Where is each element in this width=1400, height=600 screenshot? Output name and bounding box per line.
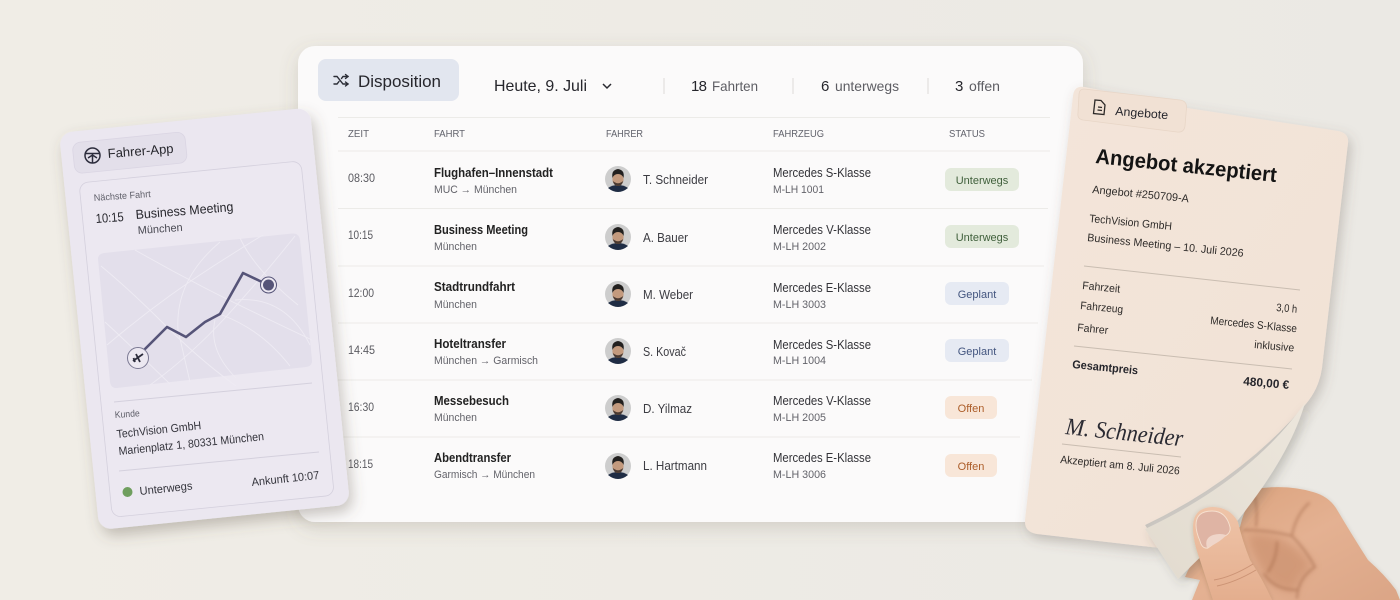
row: 08:30: 08:30: [348, 173, 375, 185]
row: 18:15: Offen: [958, 461, 984, 473]
row: 10:15: M-LH 2002: [773, 241, 826, 253]
row: 10:15: München: [434, 241, 477, 253]
table header: [348, 129, 985, 140]
row: 10:15: Mercedes V-Klasse: [773, 223, 871, 237]
line items: Fahrer: [1077, 322, 1109, 337]
row: 12:00: M. Weber: [643, 288, 693, 302]
total price: Gesamtpreis: [1072, 359, 1139, 377]
row: 08:30: T. Schneider: [643, 173, 708, 187]
row: 14:45: Mercedes S-Klasse: [773, 338, 871, 352]
status: [122, 470, 320, 498]
next ride: München: [137, 222, 183, 237]
next ride: [93, 189, 234, 237]
line items: Fahrzeit: [1082, 280, 1121, 296]
line items: [1077, 280, 1298, 354]
row: 14:45: 14:45: [348, 345, 375, 357]
date selector: Heute, 9. Juli: [494, 78, 587, 95]
tab: Angebote: Angebote: [1115, 104, 1169, 122]
status: Ankunft 10:07: [251, 470, 320, 489]
line items: Mercedes S-Klasse: [1210, 315, 1297, 335]
flap of curled paper: [1145, 403, 1305, 579]
row: 18:15: 18:15: [348, 459, 373, 471]
tab: Fahrer-App: [72, 132, 188, 174]
summary stats: unterwegs: [835, 78, 899, 94]
customer: Marienplatz 1, 80331 München: [118, 431, 265, 458]
row: 18:15: [348, 451, 997, 481]
panel: Fahrer-App: [59, 108, 350, 530]
customer: TechVision GmbH: [116, 420, 202, 441]
row: 16:30: München: [434, 412, 477, 424]
offer details: Angebot #250709-A: [1092, 184, 1190, 205]
row: 14:45: München → Garmisch: [434, 355, 538, 367]
row: 18:15: Mercedes E-Klasse: [773, 451, 871, 465]
row: 18:15: M-LH 3006: [773, 469, 826, 481]
route line: [144, 273, 262, 350]
row: 18:15: Garmisch → München: [434, 469, 535, 481]
row: 12:00: [348, 280, 1009, 311]
tab: Disposition: Disposition: [358, 73, 441, 91]
row: 10:15: A. Bauer: [643, 231, 688, 245]
customer: Kunde: [114, 408, 140, 421]
offer details: [1087, 184, 1244, 260]
row: 08:30: Unterwegs: [956, 175, 1009, 187]
line items: Fahrzeug: [1080, 300, 1124, 316]
summary stats: offen: [969, 78, 1000, 94]
next ride: Nächste Fahrt: [93, 189, 151, 204]
row: 08:30: M-LH 1001: [773, 184, 824, 196]
row: 14:45: S. Kovač: [643, 345, 686, 359]
title: Angebot akzeptiert: [1094, 145, 1278, 187]
row: 16:30: Mercedes V-Klasse: [773, 394, 871, 408]
icon: shuffle: [334, 74, 348, 86]
status: Unterwegs: [139, 480, 193, 498]
panel: Angebote: [1025, 87, 1348, 548]
marker: airport start: [128, 348, 148, 368]
row: 16:30: Messebesuch: [434, 394, 509, 408]
tab: Fahrer-App: Fahrer-App: [107, 141, 174, 161]
row: 14:45: M-LH 1004: [773, 355, 826, 367]
summary stats: [664, 78, 1000, 95]
summary stats: Fahrten: [712, 78, 758, 94]
offer details: Business Meeting – 10. Juli 2026: [1087, 232, 1244, 260]
row: 08:30: Mercedes S-Klasse: [773, 166, 871, 180]
row: 14:45: Geplant: [958, 346, 996, 358]
customer: [114, 408, 265, 458]
table header: STATUS: [949, 129, 985, 140]
line items: inklusive: [1254, 339, 1295, 354]
next ride: 10:15: [95, 209, 124, 226]
row: 14:45: [348, 337, 1009, 367]
icon: steering wheel: [85, 148, 100, 163]
row: 16:30: Offen: [958, 403, 984, 415]
summary stats: 3: [955, 78, 963, 95]
table header: FAHRZEUG: [773, 129, 824, 140]
row: 12:00: Stadtrundfahrt: [434, 280, 516, 294]
table header: FAHRER: [606, 129, 643, 140]
line items: 3,0 h: [1276, 302, 1298, 316]
lower finger shade: [1247, 534, 1313, 592]
marker: destination: [260, 277, 276, 293]
thumb: [1193, 507, 1272, 600]
fingers: [1185, 487, 1400, 600]
table header: ZEIT: [348, 129, 369, 140]
row: 12:00: Geplant: [958, 289, 996, 301]
row: 18:15: Abendtransfer: [434, 451, 511, 465]
row: 16:30: [348, 394, 997, 424]
panel: Disposition table: [298, 46, 1083, 522]
row: 16:30: D. Yilmaz: [643, 402, 692, 416]
icon: document: [1094, 100, 1105, 114]
row: 16:30: 16:30: [348, 402, 374, 414]
signature: M. Schneider: [1063, 414, 1185, 452]
row: 10:15: Unterwegs: [956, 232, 1009, 244]
row: 12:00: 12:00: [348, 288, 374, 300]
row: 12:00: München: [434, 299, 477, 311]
row: 10:15: 10:15: [348, 230, 373, 242]
row: 10:15: Business Meeting: [434, 223, 528, 237]
map: [98, 233, 312, 388]
row: 18:15: L. Hartmann: [643, 459, 707, 473]
row: 08:30: Flughafen–Innenstadt: [434, 166, 554, 180]
row: 12:00: M-LH 3003: [773, 299, 826, 311]
next ride: Business Meeting: [135, 199, 234, 222]
offer details: TechVision GmbH: [1089, 213, 1173, 233]
tab: Angebote: [1078, 89, 1187, 132]
row: 08:30: [348, 166, 1019, 196]
hand: [1145, 403, 1400, 600]
summary stats: 6: [821, 78, 829, 95]
row: 16:30: M-LH 2005: [773, 412, 826, 424]
inner card: [79, 161, 334, 517]
finger folds: [1244, 497, 1315, 598]
table header: FAHRT: [434, 129, 465, 140]
total price: 480,00 €: [1243, 374, 1290, 392]
row: 14:45: Hoteltransfer: [434, 337, 506, 351]
total price: [1072, 359, 1290, 392]
thumbnail: [1196, 511, 1230, 548]
row: 10:15: [348, 223, 1019, 253]
row: 08:30: MUC → München: [434, 184, 517, 196]
row: 12:00: Mercedes E-Klasse: [773, 281, 871, 295]
acceptance date: Akzeptiert am 8. Juli 2026: [1060, 454, 1180, 477]
summary stats: 18: [691, 78, 707, 95]
tab: Disposition: [318, 59, 459, 101]
